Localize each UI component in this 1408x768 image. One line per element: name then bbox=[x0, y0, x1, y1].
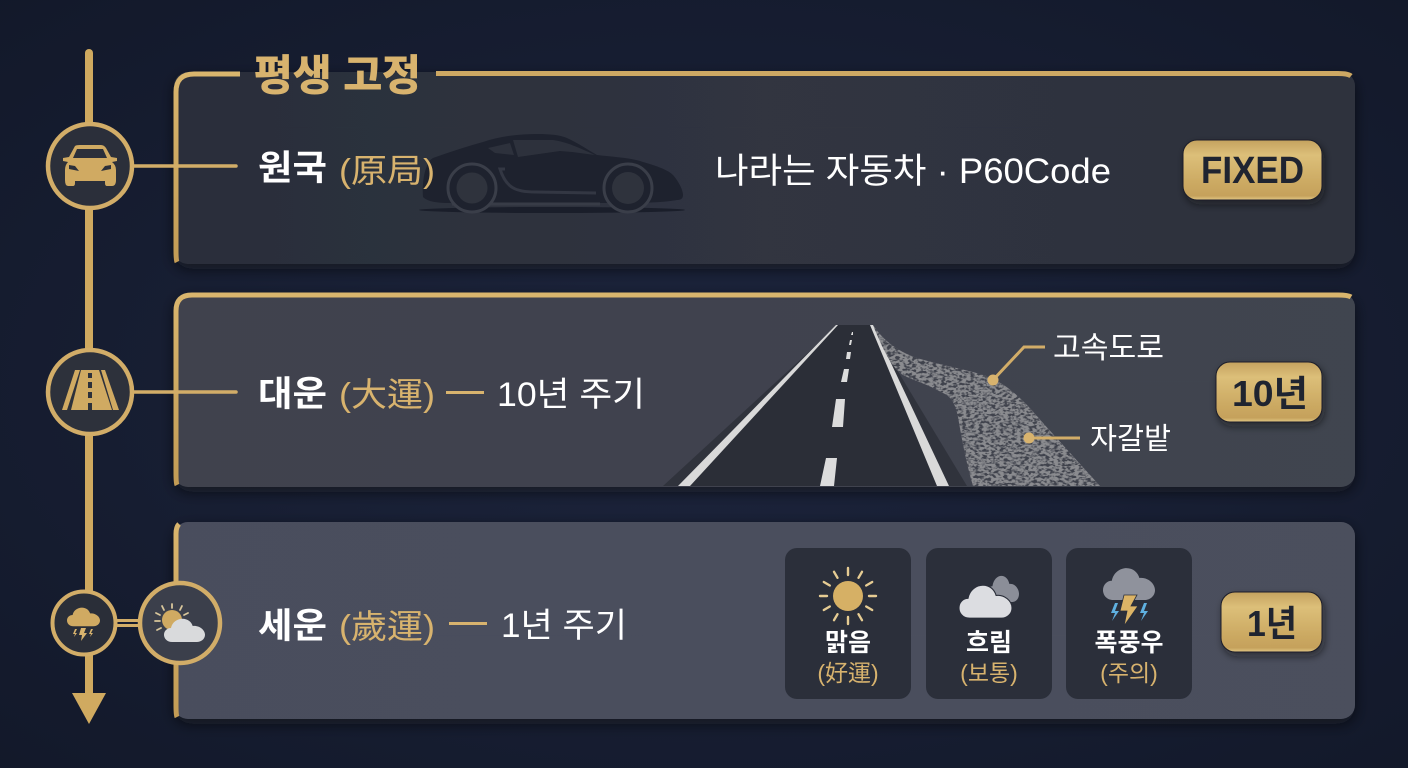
node: sun and cloud bbox=[140, 583, 220, 663]
badge: 1년: 1년 bbox=[1247, 603, 1297, 644]
icon: storm bbox=[1103, 568, 1155, 626]
badge: 1년 bbox=[1221, 592, 1322, 652]
heading: 대운: 대운 bbox=[258, 375, 327, 414]
road illustration bbox=[663, 322, 1105, 488]
panel: 대운 10 years bbox=[174, 293, 1355, 488]
label: 1년 주기: 1년 주기 bbox=[501, 607, 627, 645]
heading: 평생 고정: 평생 고정 bbox=[254, 52, 421, 99]
badge: FIXED: FIXED bbox=[1201, 150, 1304, 192]
panel: 원국 fixed bbox=[174, 72, 1355, 264]
card: 폭풍우 bbox=[1066, 548, 1192, 699]
timeline arrow bbox=[72, 53, 106, 724]
heading: 원국: 원국 bbox=[258, 149, 327, 188]
label: 10년 주기: 10년 주기 bbox=[497, 376, 645, 414]
icon: car bbox=[63, 145, 117, 186]
card: 맑음: (好運) bbox=[817, 660, 879, 686]
card: 맑음 bbox=[785, 548, 911, 699]
car silhouette bbox=[419, 134, 685, 213]
hanja: 歲運: (歲運) bbox=[339, 608, 435, 645]
card: 폭풍우: 폭풍우 bbox=[1094, 629, 1164, 657]
icon: sun bbox=[820, 568, 876, 624]
card: 흐림: (보통) bbox=[960, 660, 1018, 686]
callout: 자갈밭 bbox=[1024, 423, 1171, 456]
callout: 고속도로: 고속도로 bbox=[1053, 332, 1164, 365]
node: road bbox=[48, 350, 236, 434]
badge: FIXED bbox=[1183, 140, 1322, 200]
icon: sun cloud bbox=[155, 604, 205, 642]
hanja: 原局: (原局) bbox=[339, 152, 435, 189]
icon: storm small bbox=[67, 608, 100, 641]
dash bbox=[449, 622, 487, 625]
node: car bbox=[48, 124, 236, 208]
icon: clouds bbox=[959, 576, 1019, 618]
badge: 10년: 10년 bbox=[1232, 373, 1308, 414]
card: 흐림: 흐림 bbox=[966, 629, 1012, 657]
badge: 10년 bbox=[1216, 362, 1322, 422]
panel: 세운 1 year bbox=[174, 522, 1355, 719]
card: 맑음: 맑음 bbox=[825, 629, 871, 657]
card: 흐림 bbox=[926, 548, 1052, 699]
label: 나라는 자동차: 나라는 자동차 · P60Code bbox=[715, 152, 1111, 191]
icon: road bbox=[62, 370, 119, 410]
callout: 자갈밭: 자갈밭 bbox=[1090, 423, 1171, 456]
hanja: 大運: (大運) bbox=[339, 376, 435, 413]
heading: 세운: 세운 bbox=[258, 607, 327, 646]
card: 폭풍우: (주의) bbox=[1100, 660, 1158, 686]
node: storm timeline bbox=[52, 592, 140, 654]
callout: 고속도로 bbox=[988, 332, 1164, 386]
dash bbox=[446, 391, 484, 394]
